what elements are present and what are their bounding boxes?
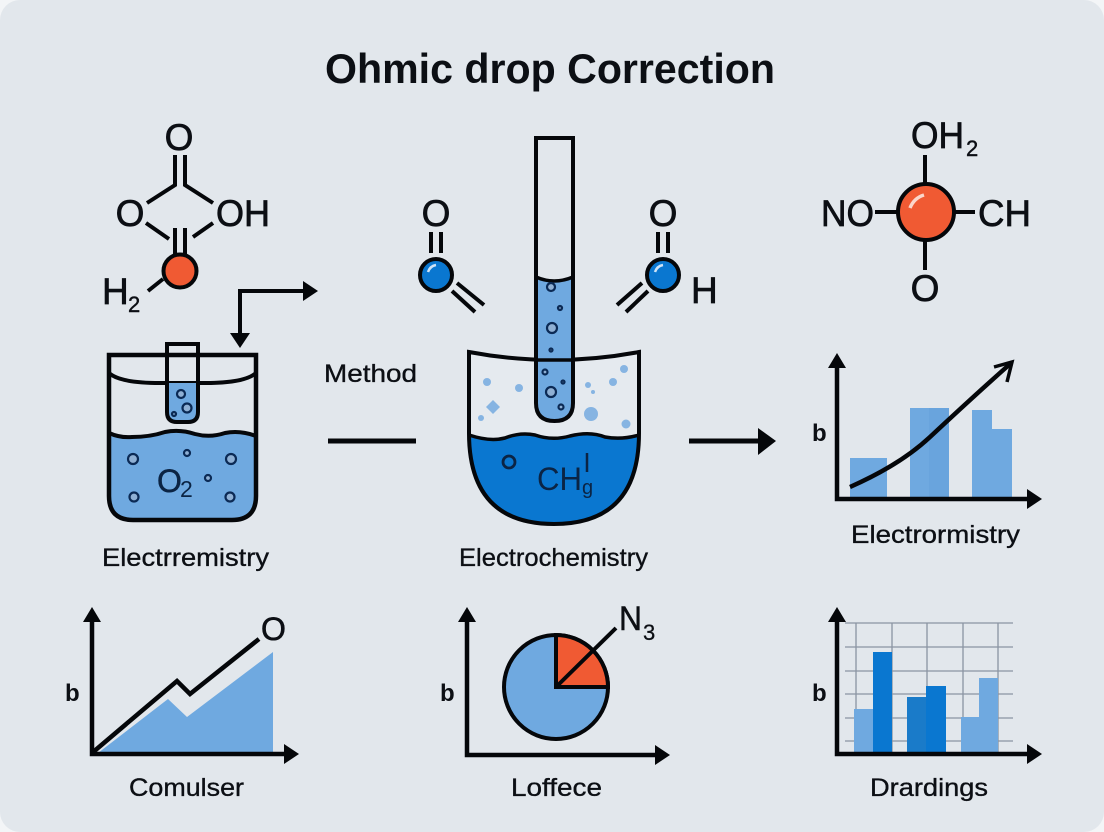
molecule: top right: NO: [821, 193, 874, 234]
title: Ohmic drop Correction: [325, 45, 775, 92]
molecule: top left: [102, 117, 270, 317]
molecule: centre right: H: [691, 270, 718, 311]
chart: pie: 3: [643, 620, 655, 645]
molecule: top right: OH: [911, 115, 964, 156]
molecule: centre left: [420, 193, 484, 312]
arrow: elbow connector: [230, 281, 318, 348]
label: centre flask: Electrochemistry: [459, 544, 649, 572]
molecule: top left: O: [165, 117, 193, 158]
molecule: centre right: [617, 193, 718, 312]
molecule: centre right: O: [649, 193, 677, 234]
beaker: left: 2: [180, 476, 193, 502]
chart: grouped bars on grid: [812, 607, 1042, 764]
label: method: Method: [324, 360, 417, 388]
chart: pie: [440, 600, 670, 765]
beaker: centre flask with tube: [469, 138, 639, 524]
beaker: left: O: [157, 463, 182, 499]
label: grid bar chart: Drardings: [870, 774, 988, 802]
molecule: top right: O: [911, 268, 939, 309]
label: left beaker: Electrremistry: [102, 544, 270, 572]
label: pie chart: Loffece: [511, 774, 602, 802]
chart: grouped bars on grid: b: [812, 680, 827, 707]
molecule: centre left: O: [422, 193, 450, 234]
molecule: top left: O: [116, 193, 144, 234]
beaker: centre flask with tube: CH: [537, 461, 582, 497]
chart: area: [65, 607, 299, 764]
beaker: centre flask with tube: g: [582, 477, 593, 499]
label: bar chart: Electrormistry: [851, 521, 1021, 549]
chart: pie: N: [619, 600, 642, 638]
molecule: top right: 2: [966, 136, 978, 161]
chart: bars with trend arrow: [812, 353, 1042, 509]
chart: bars with trend arrow: b: [812, 420, 827, 447]
molecule: top right: [821, 115, 1031, 309]
line: method dash: [328, 438, 416, 444]
chart: area: b: [65, 680, 80, 707]
label: area chart: Comulser: [129, 774, 244, 802]
arrow: to right chart: [689, 428, 776, 455]
molecule: top right: CH: [978, 193, 1031, 234]
chart: area: O: [261, 611, 286, 647]
molecule: top left: 2: [128, 292, 140, 317]
beaker: left: [109, 344, 256, 520]
chart: pie: b: [440, 680, 455, 707]
molecule: top left: H: [102, 271, 129, 312]
molecule: top left: OH: [216, 193, 270, 234]
